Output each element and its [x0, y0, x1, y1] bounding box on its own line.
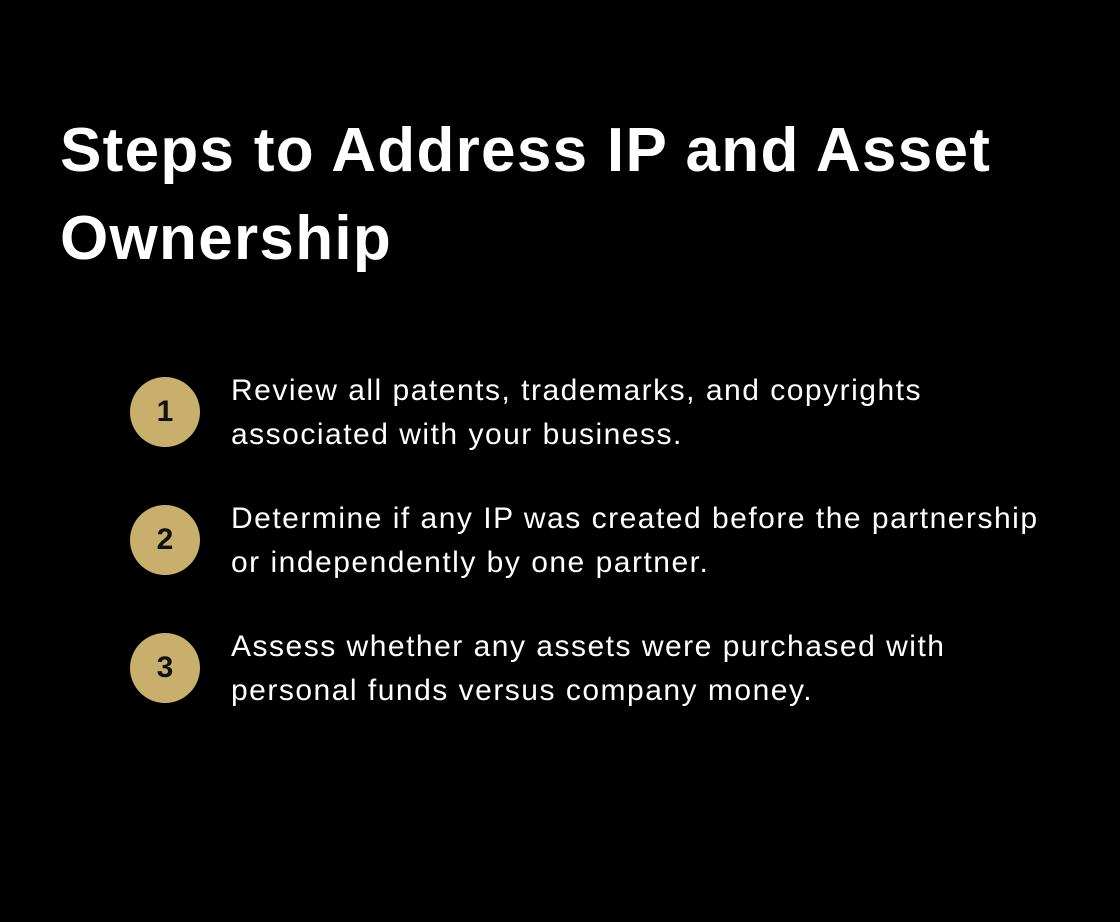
- title: Ownership: [60, 204, 392, 273]
- text: step 2: or independently by one partner.: [231, 546, 709, 579]
- icon: number 2: 2: [157, 523, 173, 556]
- icon: number 1: [130, 377, 200, 447]
- text: step 3: Assess whether any assets were purchased with: [231, 630, 945, 663]
- text: step 3: personal funds versus company money.: [231, 674, 813, 707]
- step 3: [130, 630, 945, 707]
- title: [60, 116, 991, 273]
- step 1: [130, 374, 922, 451]
- text: step 1: [231, 374, 922, 451]
- title: Steps to Address IP and Asset: [60, 116, 991, 185]
- icon: number 3: [130, 633, 200, 703]
- text: step 2: [231, 502, 1039, 579]
- icon: number 3: 3: [157, 651, 173, 684]
- text: step 1: associated with your business.: [231, 418, 683, 451]
- step 2: [130, 502, 1039, 579]
- text: step 3: [231, 630, 945, 707]
- text: step 1: Review all patents, trademarks, and copyrights: [231, 374, 922, 407]
- icon: number 1: 1: [157, 395, 173, 428]
- icon: number 2: [130, 505, 200, 575]
- text: step 2: Determine if any IP was created before the partnership: [231, 502, 1039, 535]
